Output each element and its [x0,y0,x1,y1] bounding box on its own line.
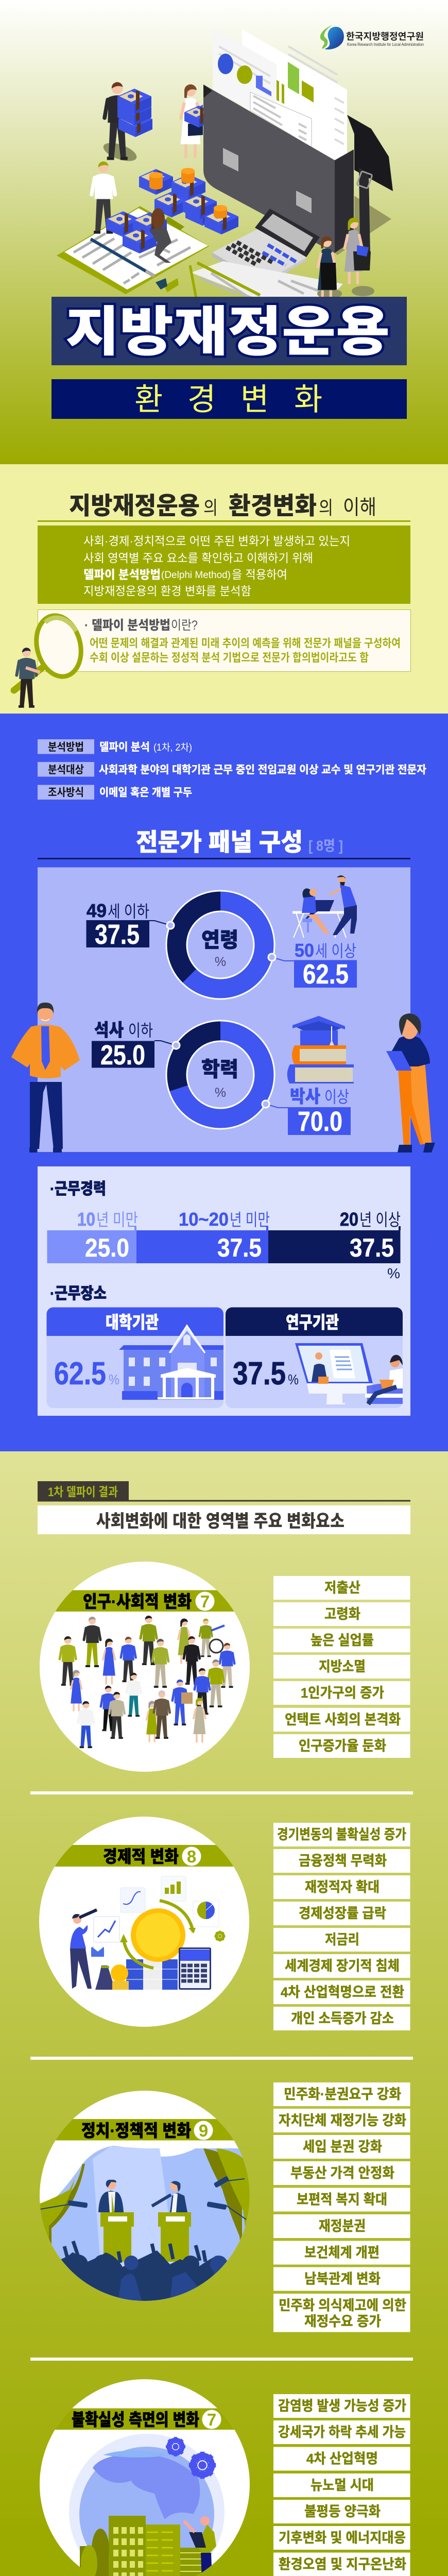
heading: 이해 [343,496,376,519]
list: political factors: 보편적 복지 확대 [297,2192,387,2207]
stacked bar chart: career: 20 [340,1209,358,1230]
list: uncertainty factors: 기후변화 및 에너지대응 [279,2530,406,2546]
heading: expert panel: 전문가 패널 구성 [136,828,303,856]
text block: purpose: 사회·경제·정치적으로 어떤 주된 변화가 발생하고 있는지 [83,534,350,548]
illustration: man in orange [11,1003,80,1153]
circle: demographic and social change [36,1562,252,1772]
stacked bar chart: career: 37.5 [350,1233,394,1262]
label: master or below: 25.0 [100,1040,145,1071]
heading: 지방재정운용 [69,492,200,519]
text block: purpose: 을 적용하여 [232,568,287,581]
chart: education donut [165,1020,275,1130]
list: political factors: 민주화·분권요구 강화 [284,2087,401,2102]
logo: Korea Research Institute for Local Administration [320,25,424,49]
circle: political and policy change [36,2091,252,2308]
subtitle bar: 환경변화 [134,382,322,417]
card: research institute [226,1308,403,1408]
list: political factors: 민주화 의식제고에 의한 [279,2298,406,2313]
heading: career: ·근무경력 [50,1180,106,1198]
callout: Delphi method definition: 어떤 문제의 해결과 관계된 미래 추이의 예측을 위해 전문가 패널을 구성하여 [90,637,401,650]
list: demographic factors: 1인가구의 증가 [301,1685,384,1701]
list: economic factors: 경기변동의 불확실성 증가 [277,1827,406,1842]
list: political factors: 재정분권 [319,2218,366,2234]
list: economic factors: 재정적자 확대 [305,1879,380,1895]
panel: hero header [0,0,448,464]
panel: career and workplace [38,1166,410,1416]
icon: person with magnifier [14,611,87,708]
circle: economic change: 8 [187,1847,196,1866]
label: 49 and under [87,900,174,950]
illustration: briefcase, money, people [57,28,393,309]
circle: uncertainty change: 7 [207,2410,216,2429]
label: 50 and over: 세 이상 [315,942,356,960]
chart: age donut [159,883,282,1007]
list: economic factors: 금융정책 무력화 [299,1853,387,1869]
circle: uncertainty change: 불확실성 측면의 변화 [72,2410,199,2429]
chart: education donut: 학력 [201,1058,238,1081]
circle: political and policy change: 9 [199,2121,208,2140]
list: demographic factors: 지방소멸 [319,1659,366,1674]
logo: Korea Research Institute for Local Administration: Korea Research Institute for Local Administration [347,42,424,47]
illustration: globe and city [69,2434,225,2576]
label: master or below: 석사 [94,1021,124,1040]
label: 50 and over [268,940,357,990]
label: 50 and over: 62.5 [303,959,349,990]
analysis overview rows: 조사방식 [48,787,84,799]
list: political factors [273,2082,410,2332]
list: uncertainty factors: 환경오염 및 지구온난화 [279,2556,406,2572]
list: economic factors: 세계경제 장기적 침체 [285,1958,400,1974]
stacked bar chart: career: 년 이상 [359,1210,401,1229]
card: research institute: % [288,1371,299,1387]
subtitle bar [51,379,407,419]
stacked bar chart: career: 37.5 [217,1233,262,1262]
callout: Delphi method definition: 이란? [171,618,198,633]
panel: first Delphi results [0,1451,448,2576]
list: uncertainty factors: 강세국가 하락 추세 가능 [278,2425,406,2440]
list: uncertainty factors: 뉴노멀 시대 [311,2478,374,2493]
label: master or below: 이하 [128,1021,153,1040]
label: master or below [92,1021,180,1071]
list: economic factors: 저금리 [325,1932,359,1947]
text block: purpose: (Delphi Method) [161,570,231,581]
text block: purpose: 델파이 분석방법 [83,568,161,581]
list: economic factors: 경제성장률 급락 [299,1906,386,1921]
stacked bar chart: career [47,1209,401,1281]
illustration: consulting at desk [292,875,357,938]
panel: analysis and expert panel section [0,714,448,1451]
analysis overview rows: 이메일 혹은 개별 구두 [99,787,192,799]
analysis overview rows: 분석방법 [48,741,84,753]
card: university: % [109,1371,119,1387]
list: economic factors: 4차 산업혁명으로 전환 [281,1985,404,2000]
list: political factors: 자치단체 재정기능 강화 [279,2113,406,2128]
heading: 의 [203,497,218,518]
list: demographic factors: 언택트 사회의 본격화 [285,1712,401,1727]
stacked bar chart: career: % [387,1265,400,1281]
stacked bar chart: career: 10~20 [179,1209,229,1230]
chart: age donut: 연령 [201,929,238,952]
panel: age and education [11,868,435,1153]
heading chip [38,1481,410,1501]
list: political factors: 재정수요 증가 [304,2314,381,2329]
list: uncertainty factors: 불평등 양극화 [304,2504,381,2519]
analysis overview rows [38,739,426,800]
list: demographic factors: 고령화 [324,1606,360,1622]
logo: Korea Research Institute for Local Administration: 한국지방행정연구원 [346,31,424,42]
text block: purpose [38,526,410,604]
subheading: 사회변화에 대한 영역별 주요 변화요소 [96,1512,344,1531]
illustration: university building [119,1326,223,1400]
card: research institute: 37.5 [233,1356,286,1392]
list: uncertainty factors [273,2394,410,2576]
circle: demographic and social change: 인구·사회적 변화 [83,1592,192,1611]
chart: age donut: % [215,955,226,969]
illustration: investor with coin [70,1876,226,1990]
stacked bar chart: career: 년 미만 [230,1210,270,1229]
card: research institute: 연구기관 [286,1313,339,1332]
label: doctorate or above [262,1087,351,1137]
list: uncertainty factors: 4차 산업혁명 [306,2451,378,2467]
analysis overview rows: 델파이 분석 [99,741,150,753]
circle: economic change: 경제적 변화 [103,1847,179,1866]
heading: workplace: ·근무장소 [50,1284,107,1302]
circle: uncertainty change [36,2379,252,2576]
list: demographic factors [273,1576,410,1758]
illustration: graduation cap and books [287,1016,354,1083]
list: economic factors [273,1823,410,2030]
circle: political and policy change: 정치·정책적 변화 [81,2121,191,2140]
stacked bar chart: career: 25.0 [85,1233,129,1262]
stacked bar chart: career: 10 [77,1209,95,1230]
text block: purpose: 사회 영역별 주요 요소를 확인하고 이해하기 위해 [83,551,313,565]
label: 49 and under: 49 [87,900,107,921]
subheading [38,1505,410,1534]
illustration: monitor with researchers [295,1343,403,1404]
analysis overview rows: 분석대상 [48,764,84,776]
analysis overview rows: (1차, 2차) [153,742,192,753]
circle: demographic and social change: 7 [200,1592,210,1611]
panel: understanding section [0,464,448,714]
list: demographic factors: 높은 실업률 [311,1633,374,1648]
callout: Delphi method definition [38,610,411,672]
list: political factors: 남북관계 변화 [304,2271,381,2286]
list: economic factors: 개인 소득증가 감소 [291,2011,394,2026]
card: university [46,1308,223,1408]
card: university: 62.5 [54,1356,106,1392]
label: 49 and under: 37.5 [95,919,140,950]
list: uncertainty factors: 감염병 발생 가능성 증가 [278,2398,406,2414]
heading [69,492,376,519]
illustration: debate stage [36,2146,252,2308]
label: doctorate or above: 이상 [324,1088,349,1106]
heading: 환경변화 [229,492,317,519]
label: 50 and over: 50 [295,940,314,961]
chart: education donut: % [215,1086,226,1100]
heading: expert panel: [ 8명 ] [308,838,343,854]
list: demographic factors: 인구증가율 둔화 [299,1738,386,1754]
list: demographic factors: 저출산 [324,1580,360,1596]
label: 49 and under: 세 이하 [108,902,149,921]
illustration: woman with clipboard [386,1013,435,1153]
title bar: 지방재정운용 [65,302,390,362]
card: university: 대학기관 [106,1313,159,1332]
label: doctorate or above: 70.0 [298,1106,342,1137]
analysis overview rows: 사회과학 분야의 대학기관 근무 중인 전임교원 이상 교수 및 연구기관 전문자 [99,764,426,776]
label: doctorate or above: 박사 [290,1087,320,1107]
list: political factors: 세입 분권 강화 [303,2139,382,2155]
callout: Delphi method definition: · 델파이 분석방법 [84,618,170,633]
callout: Delphi method definition: 수회 이상 설문하는 정성적 분석 기법으로 전문가 합의법이라고도 함 [90,651,369,664]
text block: purpose: 지방재정운용의 환경 변화를 분석함 [83,584,251,598]
heading chip: 1차 델파이 결과 [48,1485,118,1499]
heading: 의 [319,497,333,518]
circle: economic change [36,1817,252,2027]
list: political factors: 보건체계 개편 [304,2245,380,2261]
list: political factors: 부동산 가격 안정화 [290,2165,394,2181]
illustration: crowd [60,1616,234,1748]
stacked bar chart: career: 년 미만 [96,1210,138,1229]
